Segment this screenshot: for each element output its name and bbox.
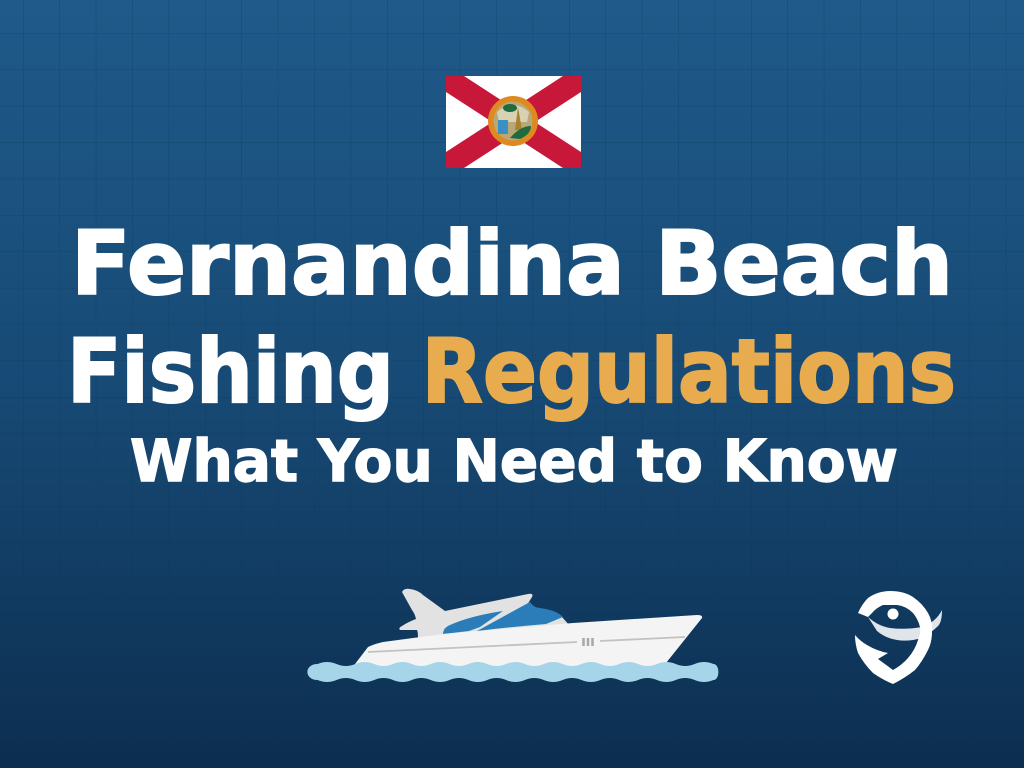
title (67, 212, 956, 495)
heading line: Fernandina Beach: Fernandina Beach (71, 212, 953, 315)
boat windows (443, 602, 563, 634)
icon: motor yacht on water (307, 589, 718, 682)
water waves (307, 662, 718, 682)
boat hull (352, 615, 702, 668)
subtitle: What You Need to Know (130, 427, 898, 495)
icon: Florida state flag (446, 76, 581, 168)
logo hook outline (855, 591, 932, 684)
logo eye (888, 608, 898, 620)
boat flybridge and fin (399, 589, 570, 642)
icon: fish hook logo (855, 591, 942, 684)
hull vents (584, 638, 592, 646)
hull stripe (368, 637, 685, 652)
heading line: Fishing Regulations: Fishing Regulations (67, 320, 956, 423)
logo fish band (868, 610, 942, 641)
